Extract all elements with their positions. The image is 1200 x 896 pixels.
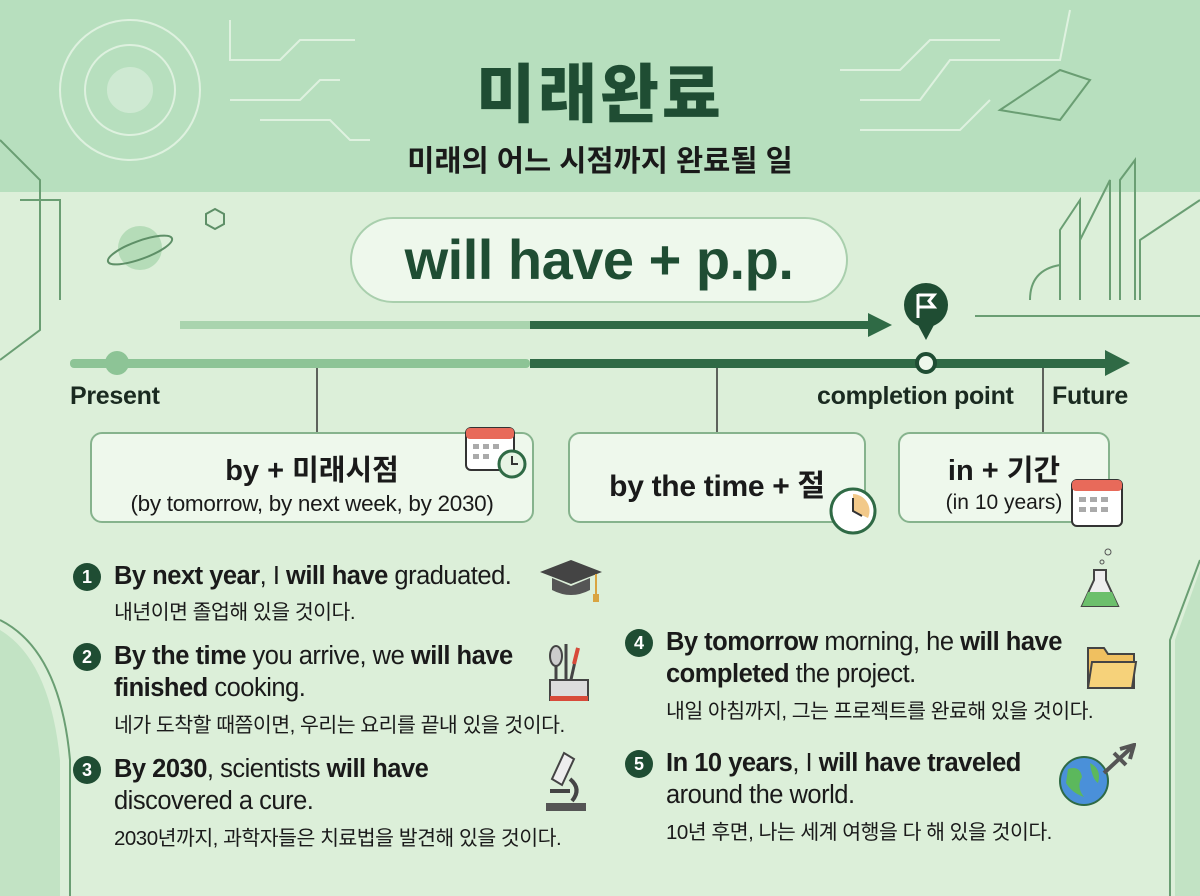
icon: cooking pot xyxy=(549,644,589,701)
icon: clock xyxy=(830,488,876,534)
example 2: 네가 도착할 때쯤이면, 우리는 요리를 끝내 있을 것이다. xyxy=(114,714,565,737)
icon: globe with plane xyxy=(1059,743,1136,806)
example 3: discovered a cure. xyxy=(114,787,313,815)
label: future: Future xyxy=(1052,382,1128,410)
formula pill xyxy=(350,217,848,303)
example 5: around the world. xyxy=(666,781,855,809)
example 5 xyxy=(625,743,1136,844)
example 1 xyxy=(73,560,602,624)
timeline xyxy=(70,283,1130,432)
example 2: By the time you arrive, we will have xyxy=(114,642,513,670)
example 1: 1 xyxy=(82,567,92,587)
example 1: 내년이면 졸업해 있을 것이다. xyxy=(114,601,355,624)
example 4: completed the project. xyxy=(666,660,916,688)
box: in + period xyxy=(898,432,1110,523)
progress arrow xyxy=(180,313,892,337)
box: in + period: (in 10 years) xyxy=(946,491,1062,514)
box: by the time + clause xyxy=(568,432,866,523)
example 1: By next year, I will have graduated. xyxy=(114,562,511,590)
top band background xyxy=(0,0,1200,192)
example 4: 내일 아침까지, 그는 프로젝트를 완료해 있을 것이다. xyxy=(666,700,1093,723)
icon: graduation cap xyxy=(540,560,602,602)
subtitle: 미래의 어느 시점까지 완료될 일 xyxy=(407,145,793,178)
icon: calendar clock xyxy=(465,427,526,478)
example 3: 3 xyxy=(82,760,92,780)
icon: microscope xyxy=(546,752,586,811)
example 4 xyxy=(625,628,1138,723)
title: 미래완료 xyxy=(476,59,724,131)
example 5: 5 xyxy=(634,754,644,774)
example 2: finished cooking. xyxy=(114,674,305,702)
box: in + period: in + 기간 xyxy=(948,455,1060,487)
example 2 xyxy=(73,642,589,737)
example 3 xyxy=(73,752,586,850)
example 4: 4 xyxy=(634,633,644,653)
example 3: By 2030, scientists will have xyxy=(114,755,428,783)
flag marker xyxy=(904,283,948,340)
example 5: In 10 years, I will have traveled xyxy=(666,749,1021,777)
example 3: 2030년까지, 과학자들은 치료법을 발견해 있을 것이다. xyxy=(114,827,561,850)
example 5: 10년 후면, 나는 세계 여행을 다 해 있을 것이다. xyxy=(666,821,1052,844)
box: by + future time xyxy=(90,432,534,523)
label: completion point: completion point xyxy=(817,382,1014,410)
example 2: 2 xyxy=(82,647,92,667)
box: by + future time: by + 미래시점 xyxy=(225,455,399,487)
main timeline xyxy=(70,350,1130,432)
example 4: By tomorrow morning, he will have xyxy=(666,628,1062,656)
label: present: Present xyxy=(70,382,160,410)
icon: flask xyxy=(1080,548,1120,607)
formula pill: will have + p.p. xyxy=(405,228,793,291)
box: by + future time: (by tomorrow, by next week, by 2030) xyxy=(130,491,494,516)
icon: calendar xyxy=(1071,479,1123,527)
box: by the time + clause: by the time + 절 xyxy=(609,470,825,503)
icon: folder xyxy=(1086,647,1138,689)
